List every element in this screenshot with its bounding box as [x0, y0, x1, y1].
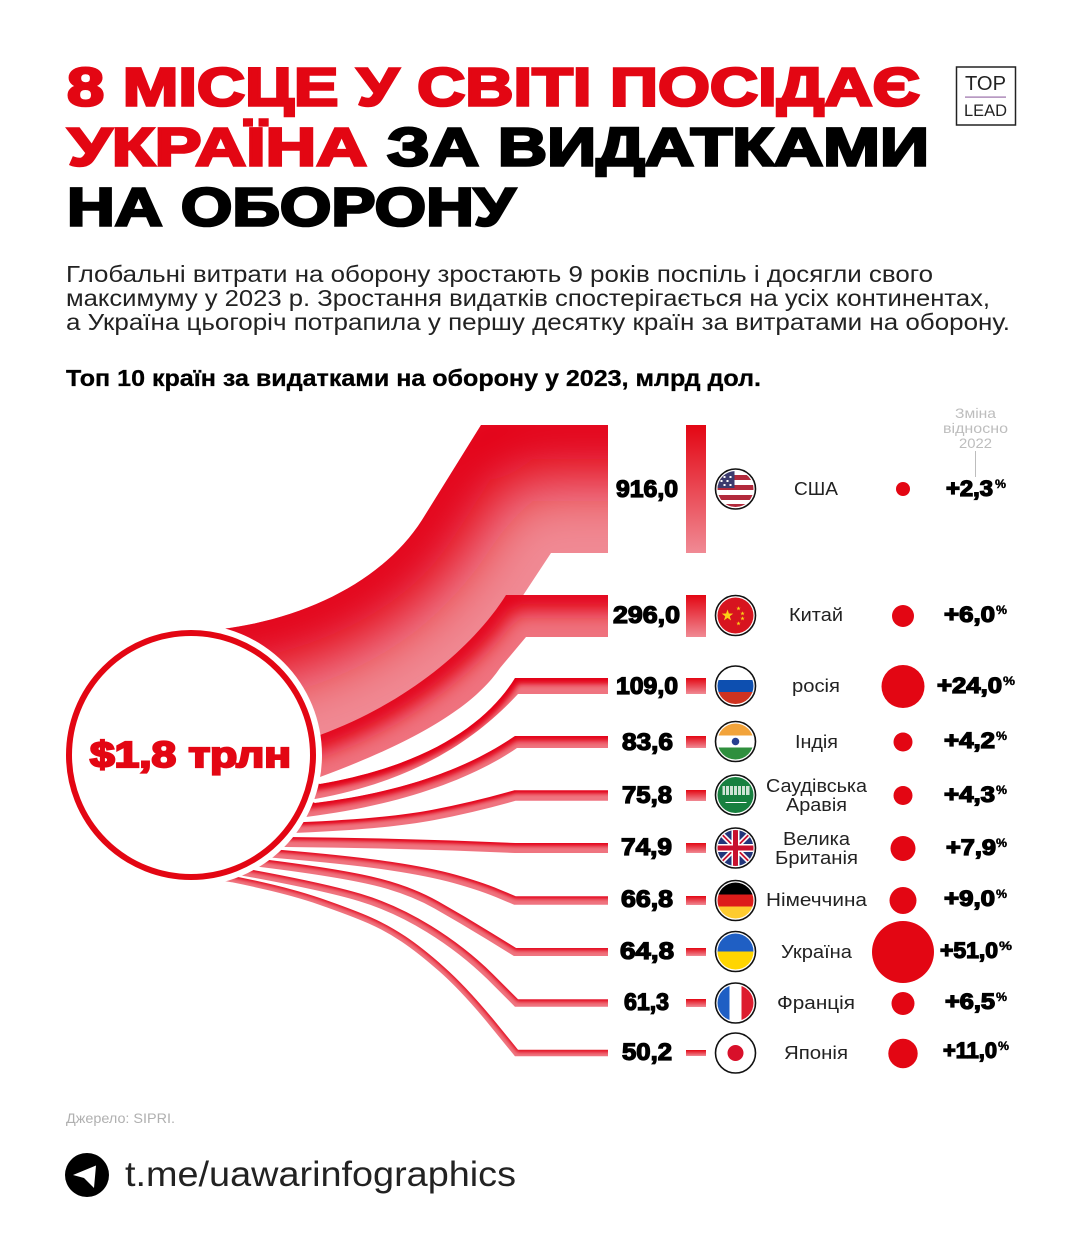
- ribbon: Німеччина: [272, 850, 608, 905]
- flag: США: [716, 469, 756, 509]
- country names: росія: [792, 676, 840, 696]
- change dots: [872, 482, 934, 1068]
- values: 916,0: [616, 476, 678, 503]
- change percentages: %: [996, 729, 1007, 743]
- country names: Аравія: [786, 795, 847, 815]
- change percentages: +24,0: [937, 673, 1002, 698]
- change percentages: [937, 476, 1015, 1063]
- country names: Німеччина: [766, 890, 868, 910]
- change percentages: %: [1003, 674, 1015, 688]
- source note: Джерело: SIPRI.: [66, 1110, 175, 1126]
- flag: Японія: [716, 1033, 756, 1073]
- country names: Японія: [784, 1043, 848, 1063]
- values: 83,6: [622, 729, 673, 756]
- ribbon: Індія: [306, 736, 608, 817]
- flag: Україна: [716, 932, 756, 972]
- flag: Німеччина: [716, 880, 756, 920]
- flag: Індія: [716, 722, 756, 762]
- change percentages: %: [996, 990, 1007, 1004]
- logo: Top Lead: TOP: [965, 73, 1006, 95]
- total circle: $1,8 трлн: $1,8 трлн: [90, 734, 291, 775]
- intro paragraph: а Україна цьогоріч потрапила у першу десятку країн за витратами на оборону.: [66, 309, 1010, 335]
- ribbon: Велика Британія: [230, 836, 640, 848]
- title: 8 МІСЦЕ У СВІТІ ПОСІДАЄ: [67, 58, 920, 118]
- ribbon: Франція: [242, 870, 608, 1007]
- icon: telegram: [65, 1153, 109, 1197]
- ribbon: Японія: [225, 877, 608, 1056]
- change percentages: +4,2: [944, 728, 995, 753]
- sankey flow chart: [225, 425, 608, 1056]
- country names: Британія: [775, 848, 858, 868]
- change percentages: +51,0: [940, 938, 998, 963]
- country names: Україна: [781, 942, 853, 962]
- country names: Саудівська: [766, 776, 868, 796]
- logo: Top Lead: [956, 67, 1016, 125]
- flag: росія: [716, 666, 756, 706]
- chart heading: Топ 10 країн за видатками на оборону у 2023, млрд дол.: [66, 365, 761, 391]
- column note: change vs 2022: 2022: [959, 435, 992, 451]
- change percentages: +6,5: [945, 989, 995, 1014]
- ribbon: США: [225, 425, 608, 735]
- values: 75,8: [622, 782, 672, 809]
- values: 50,2: [622, 1039, 672, 1066]
- values: 61,3: [624, 989, 669, 1016]
- title: НА ОБОРОНУ: [67, 178, 517, 238]
- country names: Франція: [777, 993, 855, 1013]
- intro paragraph: Глобальні витрати на оборону зростають 9 років поспіль і досягли свого: [66, 261, 933, 287]
- country names: Індія: [795, 732, 838, 752]
- flag: Франція: [716, 983, 756, 1023]
- telegram link: t.me/uawarinfographics: [125, 1155, 516, 1194]
- ribbon: Китай: [320, 595, 608, 777]
- country names: Китай: [789, 605, 843, 625]
- ribbon: росія: [314, 678, 608, 799]
- column note: change vs 2022: [943, 405, 1008, 477]
- values: 74,9: [621, 834, 672, 861]
- ribbon: Саудівська Аравія: [296, 790, 608, 833]
- change percentages: %: [996, 836, 1007, 850]
- change percentages: +11,0: [943, 1038, 997, 1063]
- values: [613, 476, 680, 1066]
- change percentages: +7,9: [946, 835, 996, 860]
- change percentages: %: [998, 1039, 1009, 1053]
- country names: Велика: [783, 829, 851, 849]
- title: ЗА ВИДАТКАМИ: [387, 118, 929, 178]
- values: 66,8: [621, 886, 673, 913]
- change percentages: +4,3: [944, 782, 995, 807]
- flag: Саудівська Аравія: [716, 775, 756, 815]
- ribbon: Україна: [259, 860, 608, 956]
- intro paragraph: [66, 261, 1010, 335]
- value bars: [686, 425, 706, 1056]
- values: 109,0: [616, 673, 678, 700]
- change percentages: +2,3: [946, 476, 993, 501]
- total circle: $1,8 трлн: [60, 624, 322, 886]
- logo: Top Lead: LEAD: [964, 101, 1007, 120]
- values: 296,0: [613, 602, 680, 629]
- flag: Велика Британія: [716, 828, 756, 868]
- change percentages: %: [999, 939, 1012, 953]
- country names: США: [794, 479, 838, 499]
- title: [67, 58, 929, 238]
- column note: change vs 2022: відносно: [943, 420, 1008, 436]
- change percentages: +6,0: [944, 602, 995, 627]
- values: 64,8: [620, 938, 674, 965]
- intro paragraph: максимуму у 2023 р. Зростання видатків спостерігається на усіх континентах,: [66, 285, 990, 311]
- change percentages: %: [996, 603, 1007, 617]
- change percentages: %: [995, 477, 1006, 491]
- flag: Китай: [716, 596, 756, 636]
- title: УКРАЇНА: [68, 118, 367, 178]
- change percentages: %: [996, 783, 1007, 797]
- country names: [766, 479, 868, 1063]
- change percentages: +9,0: [944, 886, 995, 911]
- column note: change vs 2022: Зміна: [955, 405, 996, 421]
- change percentages: %: [996, 887, 1007, 901]
